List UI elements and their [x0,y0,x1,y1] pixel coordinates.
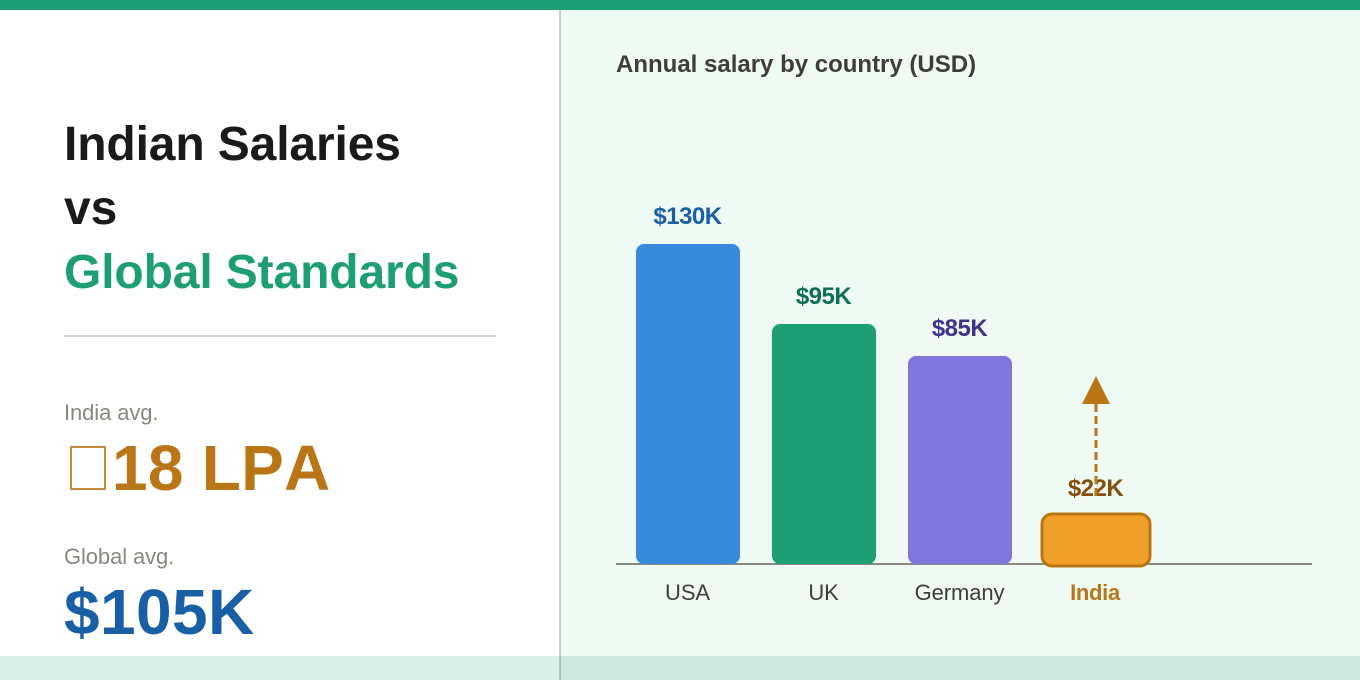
bar: USA: USA [665,580,710,605]
bar: USA: $130K [653,203,723,230]
arrow: gap to global salaries [1082,376,1110,496]
heading: main title: Indian Salaries [64,118,401,171]
bar: Germany: $85K [932,315,988,342]
stat: Global average: Global avg. [64,544,174,569]
heading: main title: vs [64,182,117,235]
stat: India average: 18 LPA [112,432,330,504]
stat: Global average: $105K [64,576,255,648]
bar: India [1042,475,1150,605]
chart heading: Annual salary by country (USD) [616,51,976,78]
bottom accent strip [0,656,1360,680]
stat: India average [64,400,330,504]
heading: main title [64,118,459,299]
bar: India: India [1070,580,1121,605]
stat: India average: India avg. [64,400,158,425]
stat: Global average [64,544,255,648]
bar: Germany [908,315,1012,605]
bar: UK: $95K [796,283,852,310]
bar: India: $22K [1068,475,1124,502]
heading: main title: Global Standards [64,246,459,299]
bar chart [616,203,1312,605]
panel divider [559,10,561,680]
bar: UK [772,283,876,605]
icon: missing rupee glyph box [71,447,105,489]
top accent bar [0,0,1360,10]
bar: Germany: Germany [915,580,1004,605]
panel: chart background [560,0,1360,680]
bar: USA [636,203,740,605]
bar: UK: UK [808,580,839,605]
